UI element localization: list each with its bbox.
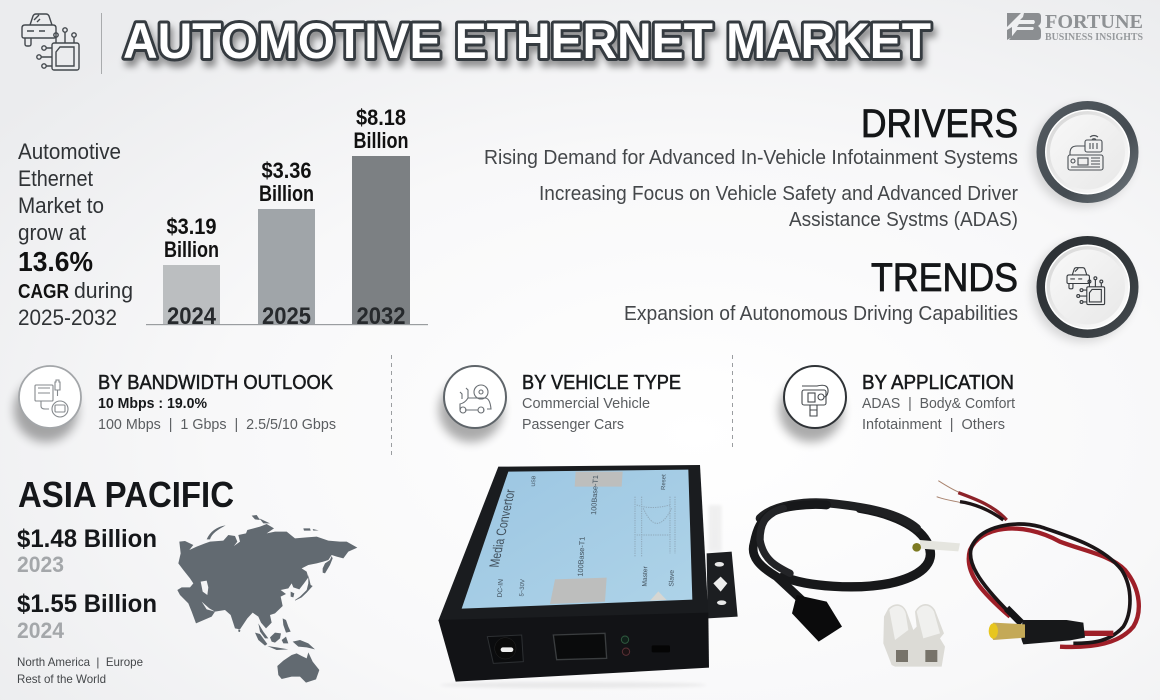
text block: CAGR statement: Ethernet bbox=[18, 166, 93, 191]
divider right bbox=[732, 355, 734, 448]
icon: application bbox=[779, 366, 846, 442]
label text on device: 100Base-T1 bbox=[589, 475, 600, 515]
icon: drivers badge bbox=[1032, 101, 1138, 207]
panel: by application: ADAS | Body& Comfort bbox=[862, 395, 1016, 412]
text block: CAGR statement: Market to bbox=[18, 193, 104, 218]
panel: by vehicle type: Commercial Vehicle bbox=[522, 395, 650, 412]
label text on device: 5~30V bbox=[519, 579, 527, 597]
panel: by bandwidth outlook: 10 Mbps : 19.0% bbox=[98, 396, 207, 412]
text block: CAGR statement: during bbox=[74, 278, 133, 303]
bar 2032: Billion bbox=[354, 128, 408, 153]
stat: 2023: $1.48 Billion bbox=[17, 525, 157, 553]
bar 2024: $3.19 bbox=[166, 214, 216, 239]
bar 2032: 2032 bbox=[356, 303, 406, 330]
label text on device: Slave bbox=[668, 570, 676, 587]
text block: CAGR statement: 13.6% bbox=[18, 246, 93, 277]
label text on device: Reset bbox=[661, 474, 668, 490]
text block: CAGR statement bbox=[18, 139, 133, 330]
label text on device: Media Convertor bbox=[486, 489, 518, 568]
drivers text: Increasing Focus on Vehicle Safety and Advanced Driver bbox=[539, 183, 1018, 205]
bar 2024: 2024 bbox=[167, 303, 217, 330]
label text on device: DC-IN bbox=[497, 579, 505, 598]
trends heading: TRENDS bbox=[871, 256, 1018, 300]
trends text: Expansion of Autonomous Driving Capabilities bbox=[624, 303, 1018, 325]
panel: by application: Infotainment | Others bbox=[862, 416, 1005, 433]
stat: 2023 bbox=[17, 525, 157, 577]
mounting tab bbox=[707, 552, 738, 618]
header divider bbox=[101, 13, 102, 74]
bar 2032: $8.18 bbox=[356, 105, 406, 130]
other regions: Rest of the World bbox=[17, 672, 106, 686]
label text on device bbox=[486, 474, 676, 598]
other regions: North America | Europe bbox=[17, 655, 143, 669]
divider left bbox=[390, 355, 392, 455]
panel: by bandwidth outlook bbox=[14, 366, 336, 442]
panel: by application: BY APPLICATION bbox=[862, 372, 1014, 394]
drivers text bbox=[484, 147, 1018, 231]
panel: by vehicle type bbox=[439, 366, 681, 442]
text block: CAGR statement: 2025-2032 bbox=[18, 305, 117, 330]
product photo: media converter bbox=[438, 465, 738, 688]
text block: CAGR statement: Automotive bbox=[18, 139, 121, 164]
panel: by vehicle type: BY VEHICLE TYPE bbox=[522, 372, 681, 394]
bar 2025: 2025 bbox=[262, 303, 311, 330]
bar chart bbox=[146, 105, 428, 330]
logo: Fortune Business Insights bbox=[1007, 11, 1143, 43]
bar 2024: Billion bbox=[164, 237, 219, 262]
icon: bandwidth bbox=[14, 366, 81, 442]
label text on device: USB bbox=[531, 475, 537, 487]
other regions bbox=[17, 655, 143, 686]
bar 2025: Billion bbox=[259, 181, 314, 206]
bar 2024 bbox=[163, 214, 220, 330]
bar 2025 bbox=[258, 158, 315, 330]
text block: CAGR statement: grow at bbox=[18, 220, 86, 245]
stat: 2024 bbox=[17, 590, 157, 643]
panel: by vehicle type: Passenger Cars bbox=[522, 416, 624, 433]
drivers text: Assistance Systms (ADAS) bbox=[789, 209, 1018, 231]
drivers heading: DRIVERS bbox=[861, 102, 1018, 146]
label text on device: 100Base-T1 bbox=[576, 536, 587, 577]
stat: 2024: 2024 bbox=[17, 618, 65, 643]
heading: Asia Pacific: ASIA PACIFIC bbox=[18, 474, 234, 515]
bar 2032 bbox=[352, 105, 410, 330]
drivers text: Rising Demand for Advanced In-Vehicle Infotainment Systems bbox=[484, 147, 1018, 169]
product photo: black cable bbox=[753, 503, 960, 642]
panel: by bandwidth outlook: 100 Mbps | 1 Gbps | 2.5/5/10 Gbps bbox=[98, 416, 336, 433]
logo: Fortune Business Insights: FORTUNE bbox=[1045, 11, 1143, 33]
header icon: car with chip bbox=[22, 14, 79, 70]
icon: vehicle bbox=[439, 366, 506, 442]
logo: Fortune Business Insights: BUSINESS INSIGHTS bbox=[1045, 32, 1143, 43]
label text on device: Master bbox=[642, 565, 649, 587]
icon: trends badge bbox=[1032, 236, 1138, 342]
product photo: red and black power cable bbox=[937, 481, 1139, 647]
product photo: white connector bbox=[883, 604, 945, 667]
title: AUTOMOTIVE ETHERNET MARKET bbox=[123, 13, 931, 69]
panel: by application bbox=[779, 366, 1016, 442]
stat: 2024: $1.55 Billion bbox=[17, 590, 157, 618]
stat: 2023: 2023 bbox=[17, 552, 64, 577]
map: Asia Pacific bbox=[177, 515, 357, 683]
bar 2025: $3.36 bbox=[262, 158, 312, 183]
text block: CAGR statement: CAGR bbox=[18, 280, 69, 303]
panel: by bandwidth outlook: BY BANDWIDTH OUTLOOK bbox=[98, 372, 334, 394]
